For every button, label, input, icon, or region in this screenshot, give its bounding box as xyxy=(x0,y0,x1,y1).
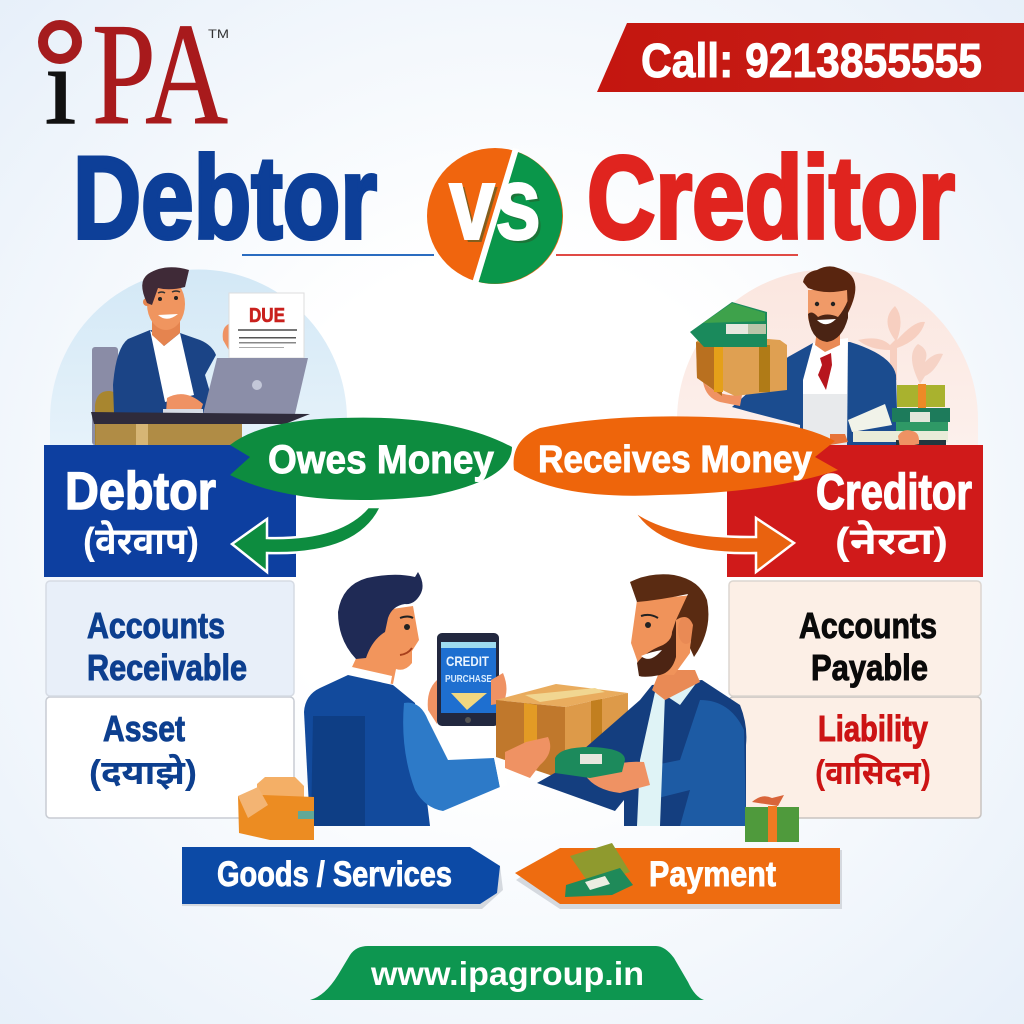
panel: debtor heading box: Debtor xyxy=(65,462,216,521)
icon: open box xyxy=(238,777,314,840)
bubble: receives money xyxy=(514,416,838,496)
illustration: buyer with tablet xyxy=(304,572,507,826)
panel: debtor illustration xyxy=(50,267,347,446)
vs badge xyxy=(427,146,563,284)
illustration: buyer with tablet: PURCHASE xyxy=(445,674,492,685)
illustration: buyer with tablet: CREDIT xyxy=(446,653,489,669)
panel: creditor table: Liability xyxy=(818,708,928,749)
footer: website xyxy=(310,946,704,1000)
panel: creditor table xyxy=(729,581,981,818)
logo: ı xyxy=(45,25,76,147)
panel: creditor heading box: Creditor xyxy=(816,464,972,520)
panel: debtor table: Receivable xyxy=(87,647,247,688)
label: payment: Payment xyxy=(649,855,776,894)
panel: debtor heading box: (वेरवाप) xyxy=(83,519,199,563)
vs badge: vs xyxy=(452,149,544,265)
panel: debtor table xyxy=(46,581,294,818)
bubble: receives money: Receives Money xyxy=(538,439,812,481)
bubble: owes money: Owes Money xyxy=(268,438,495,482)
label: goods / services xyxy=(182,847,503,909)
panel: creditor illustration xyxy=(677,266,978,448)
panel: debtor heading box xyxy=(44,445,296,577)
bubble: owes money xyxy=(230,418,512,500)
call banner xyxy=(597,23,1024,92)
title: Debtor: Debtor xyxy=(73,132,377,263)
label: goods / services: Goods / Services xyxy=(217,855,452,894)
logo xyxy=(43,0,229,155)
panel: creditor table: (वासिदन) xyxy=(815,754,931,792)
panel: creditor table: Accounts xyxy=(799,605,937,646)
arrow: green to debtor xyxy=(232,507,381,572)
icon: gift xyxy=(745,795,799,842)
illustration: parcel xyxy=(496,684,628,780)
panel: debtor illustration: DUE xyxy=(249,305,285,327)
call banner: Call: 9213855555 xyxy=(641,35,982,88)
vs badge: vs xyxy=(449,146,541,262)
panel: creditor heading box: (नेरटा) xyxy=(835,519,948,563)
panel: creditor table: Payable xyxy=(811,647,928,688)
panel: debtor table: Accounts xyxy=(87,605,225,646)
arrow: orange to creditor xyxy=(633,510,794,572)
panel: debtor table: Asset xyxy=(103,708,185,749)
logo: TM xyxy=(208,27,229,41)
illustration: seller with cash xyxy=(505,574,746,826)
panel: debtor table: (दयाझे) xyxy=(89,753,197,792)
label: payment xyxy=(515,843,842,909)
footer: website: www.ipagroup.in xyxy=(370,955,644,992)
panel: creditor heading box xyxy=(727,445,983,577)
